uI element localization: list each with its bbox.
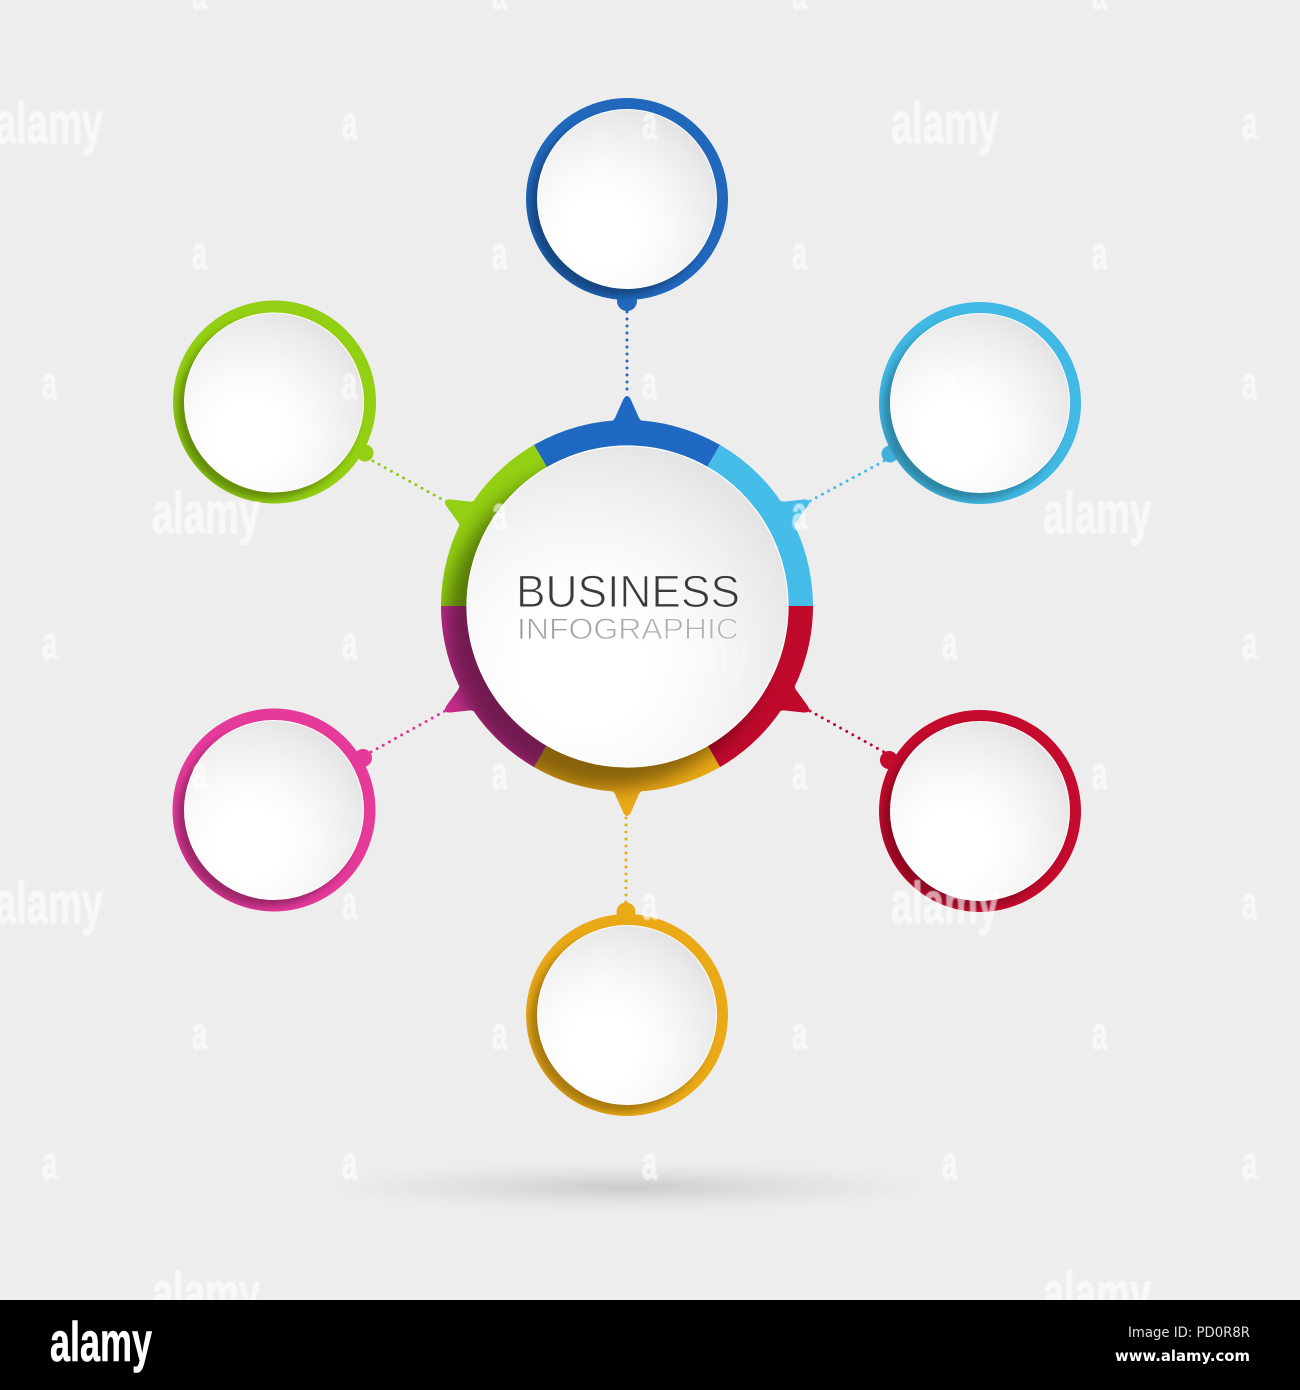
watermark: a <box>942 357 957 409</box>
watermark: a <box>1242 97 1257 149</box>
watermark: alamy <box>152 1261 260 1326</box>
watermark: alamy <box>1043 481 1151 546</box>
hub segment: cyan <box>627 445 821 606</box>
hub segment: red <box>627 606 821 767</box>
image id: Image ID: PD0R8R <box>1128 1325 1250 1341</box>
watermark: a <box>942 1137 957 1189</box>
watermark: a <box>342 357 357 409</box>
hub segment: blue <box>534 396 720 606</box>
watermark: a <box>192 1007 207 1059</box>
hub segment: gold <box>534 606 720 816</box>
hub subheading: INFOGRAPHIC <box>517 613 739 646</box>
watermark: a <box>642 97 657 149</box>
ground shadow <box>328 1163 928 1211</box>
hub heading: BUSINESS <box>516 566 740 617</box>
watermark: a <box>342 97 357 149</box>
watermark: a <box>492 227 507 279</box>
footer bar <box>0 1300 1300 1390</box>
watermark: a <box>792 1007 807 1059</box>
watermark: a <box>342 1137 357 1189</box>
website: www.alamy.com <box>1115 1347 1250 1365</box>
watermark: a <box>342 617 357 669</box>
node: pink <box>172 708 376 912</box>
watermark: alamy <box>152 481 260 546</box>
watermark: alamy <box>891 91 999 156</box>
watermark: a <box>1092 747 1107 799</box>
watermark: alamy <box>891 871 999 936</box>
watermark: a <box>642 877 657 929</box>
central hub <box>433 396 821 816</box>
hub disc <box>467 446 788 767</box>
watermark: a <box>342 877 357 929</box>
watermark: a <box>492 1007 507 1059</box>
watermark: a <box>1242 617 1257 669</box>
watermark: a <box>942 617 957 669</box>
watermark: alamy <box>642 621 750 686</box>
watermark: a <box>642 1137 657 1189</box>
watermark: a <box>792 487 807 539</box>
connector: green <box>373 461 445 501</box>
watermark: a <box>492 747 507 799</box>
watermark: a <box>1242 877 1257 929</box>
node: green <box>173 300 376 504</box>
node: gold <box>526 902 728 1116</box>
node: blue <box>526 98 728 311</box>
hub segment: purple <box>433 606 627 767</box>
watermark: a <box>192 227 207 279</box>
watermark: alamy <box>1043 1261 1151 1326</box>
connector: gold <box>624 818 628 905</box>
connector: red <box>810 711 884 752</box>
node: red <box>879 710 1081 912</box>
watermark: a <box>42 357 57 409</box>
connector: pink <box>371 711 445 752</box>
watermark: a <box>42 1137 57 1189</box>
watermark: a <box>1092 1007 1107 1059</box>
connector: blue <box>626 312 628 396</box>
hub cast shadow <box>446 464 770 788</box>
watermark: a <box>1242 1137 1257 1189</box>
watermark: a <box>792 227 807 279</box>
watermark: a <box>1242 357 1257 409</box>
watermark: a <box>42 617 57 669</box>
watermark: a <box>792 747 807 799</box>
hub segment: green <box>433 445 627 606</box>
connector: cyan <box>810 461 884 501</box>
node: cyan <box>879 302 1081 504</box>
watermark: a <box>492 487 507 539</box>
watermark: a <box>642 357 657 409</box>
watermark: a <box>192 747 207 799</box>
watermark: a <box>1092 227 1107 279</box>
footer logo: alamy <box>50 1310 152 1373</box>
